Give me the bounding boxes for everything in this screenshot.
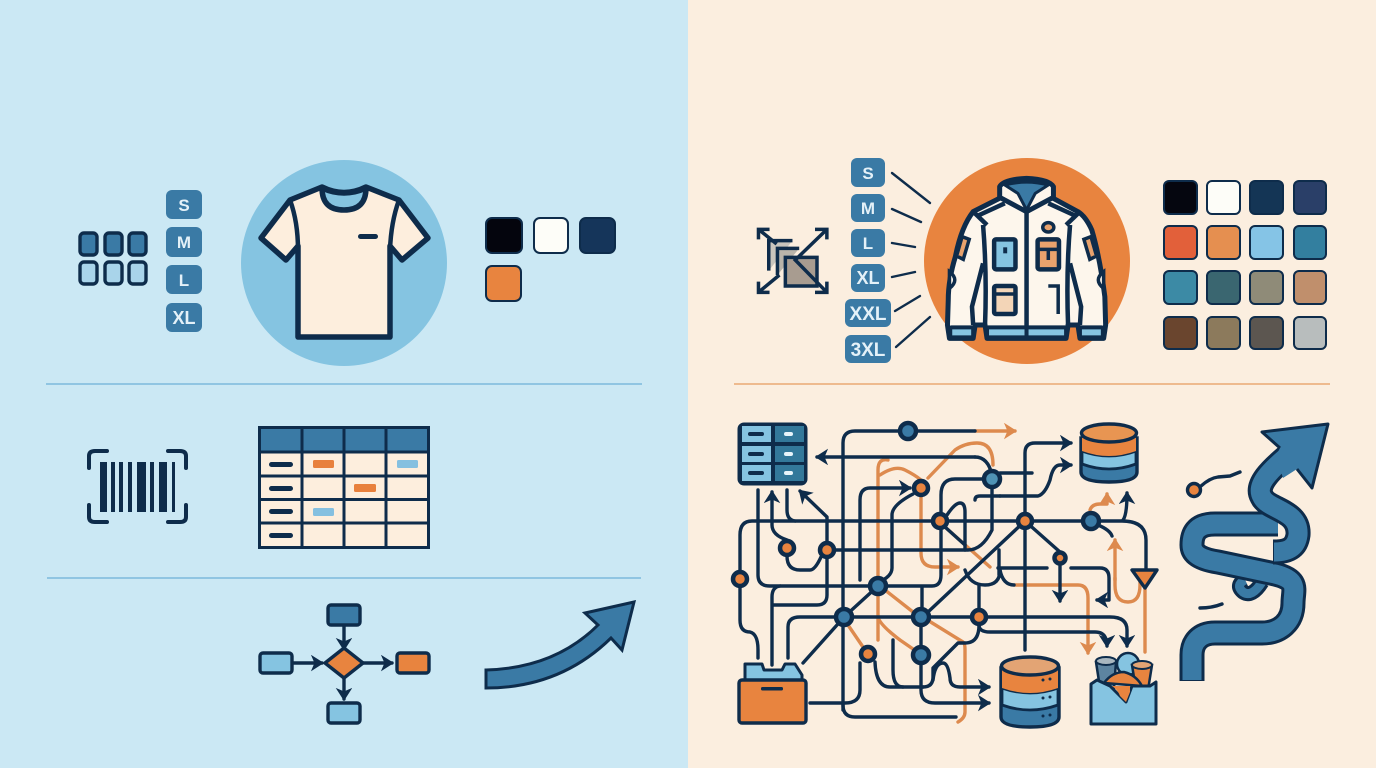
icon: database top [1081,424,1137,482]
size chips: jacket: L [863,234,873,253]
divider lines left [46,384,642,578]
valve triangle [1132,570,1157,588]
navy routes [740,431,1146,717]
flowchart: simple process [260,605,429,723]
size chips: jacket: 3XL [851,340,886,361]
panel: complex product background [688,0,1376,768]
icon: t-shirt [261,187,428,337]
size chips: jacket: S [862,164,874,183]
icon: database bottom [1001,657,1059,727]
size chips: t-shirt: M [177,233,191,252]
divider line right [734,383,1330,385]
orange routes [848,431,1145,722]
connector lines from sizes to jacket [892,173,930,347]
size chips: jacket [845,158,891,363]
small route: node and dash beside serpentine arrow [1188,472,1240,608]
arrow: complex serpentine [1192,424,1328,681]
circle behind t-shirt [241,160,447,366]
icon: barcode scanner [89,451,186,522]
circle behind jacket [924,158,1130,364]
panel: simple product background [0,0,688,768]
size chips: t-shirt: L [179,271,189,290]
network: tangled routes [733,423,1157,722]
route nodes [733,423,1099,663]
icon: jacket [947,178,1106,338]
colour swatches: jacket [1164,181,1326,349]
size chips: t-shirt: S [178,196,190,215]
colour swatches: t-shirt [486,218,615,301]
size chips: jacket: M [861,199,875,218]
icon: folder [739,664,806,723]
size chips: t-shirt [166,190,202,332]
size chips: t-shirt: XL [172,308,196,328]
icon: server table [739,424,806,484]
icon: resize arrows and stacked squares [758,229,827,292]
icon: box of goods [1091,653,1156,724]
icon: small variant grid [80,233,146,284]
table: inventory matrix [259,427,429,548]
arrow: simple upward curve [486,602,634,688]
size chips: jacket: XL [856,268,880,288]
size chips: jacket: XXL [850,304,887,325]
